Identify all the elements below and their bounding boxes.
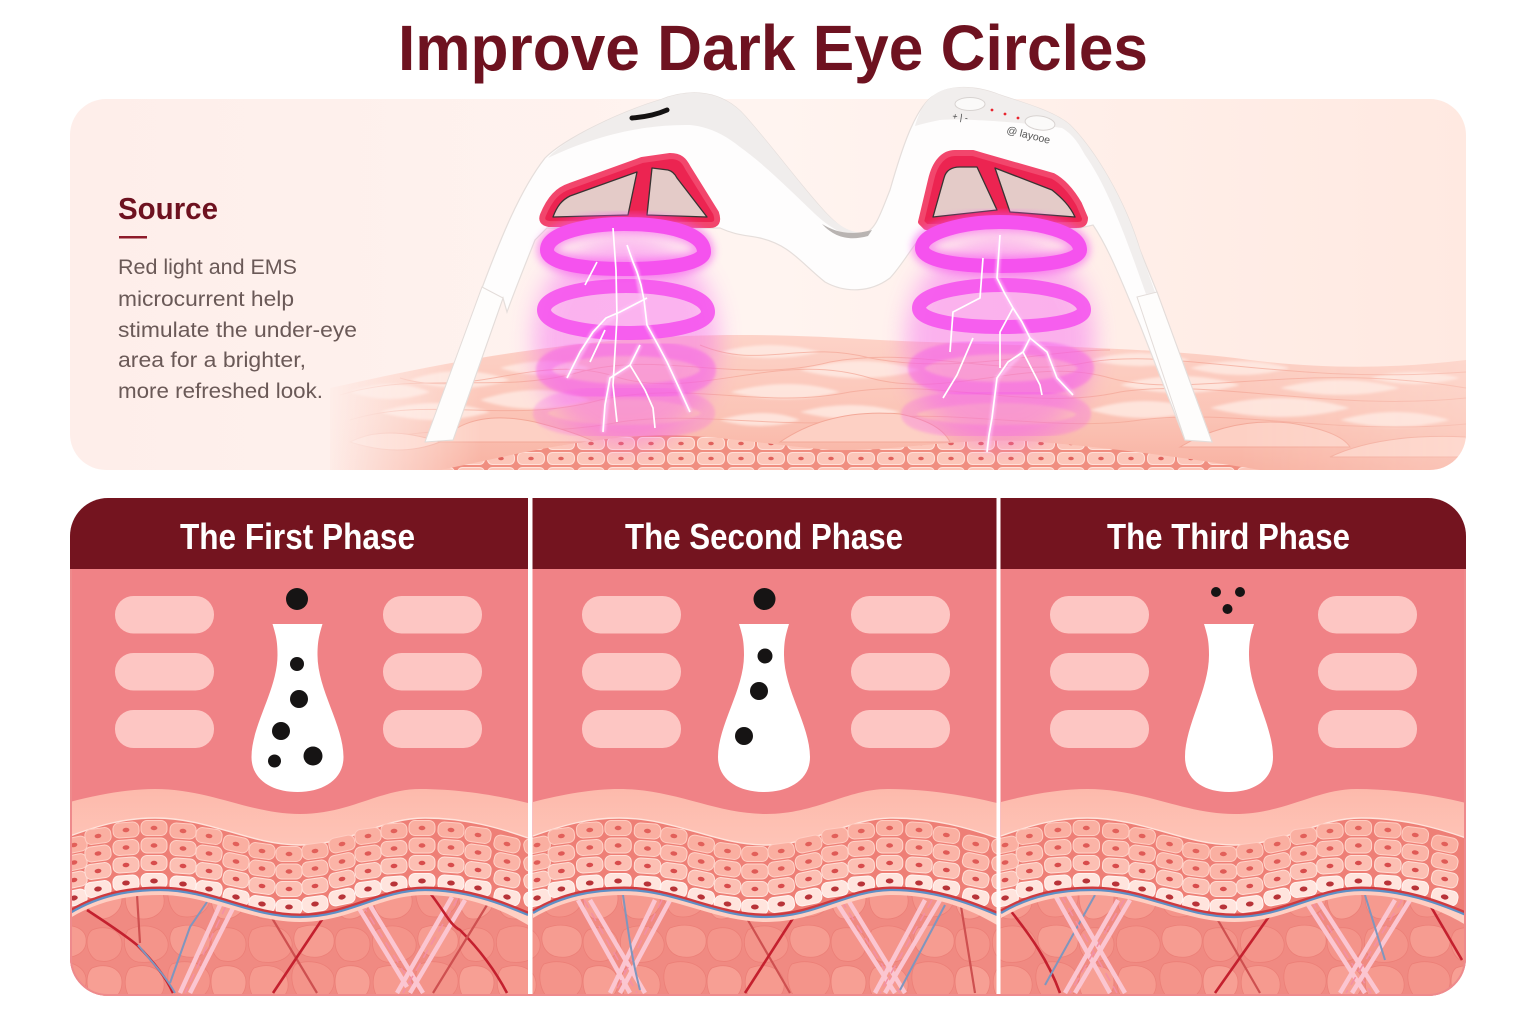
first phase: placeholder pills: [115, 596, 482, 748]
device: under-eye massager: [425, 87, 1212, 442]
first phase: flask with many particles: [252, 588, 344, 792]
title: Improve Dark Eye Circles: [398, 12, 1148, 84]
right eye pad: [921, 153, 1085, 227]
skin cross-section: third phase: [991, 789, 1466, 925]
light rings: right eye: [906, 222, 1094, 445]
source description: more refreshed look.: [118, 380, 323, 403]
charging slot: [632, 110, 667, 118]
heading underline: [119, 236, 147, 238]
vessels: first phase: [87, 893, 507, 993]
light rings: left eye: [534, 224, 718, 445]
phase headers bar: [70, 498, 1466, 569]
lightning: left eye: [567, 228, 690, 432]
bridge shadow: [822, 224, 872, 238]
control panel: buttons, LEDs and logo: + | -: [952, 111, 969, 123]
source description: Red light and EMS: [118, 256, 297, 279]
second phase: flask with fewer particles: [718, 588, 810, 792]
source description: microcurrent help: [118, 288, 294, 311]
lightning: right eye: [943, 235, 1073, 452]
phase panel outline: [71, 569, 1465, 995]
heading: second phase: The Second Phase: [625, 516, 903, 557]
source description: area for a brighter,: [118, 349, 306, 372]
tissue layer: [70, 880, 1466, 996]
third phase: placeholder pills: [1050, 596, 1417, 748]
heading: third phase: The Third Phase: [1107, 516, 1350, 557]
source heading: Source: [118, 191, 218, 226]
second phase: placeholder pills: [582, 596, 950, 748]
source description: stimulate the under-eye: [118, 319, 357, 342]
source description: [118, 256, 357, 403]
divider: second and third phase: [996, 498, 1000, 996]
third phase: clear flask: [1185, 587, 1273, 792]
right top face shading: [915, 87, 1155, 294]
right foot tip: [1137, 292, 1212, 442]
skin cross-section: second phase: [523, 789, 997, 925]
left top face shading: [548, 93, 862, 238]
heading: first phase: The First Phase: [180, 516, 415, 557]
panel: source hero: [70, 87, 1466, 470]
divider: first and second phase: [528, 498, 532, 996]
vessels: second phase: [578, 895, 975, 993]
control panel: buttons, LEDs and logo: @ layooe: [1005, 124, 1052, 147]
left eye pad: [542, 156, 717, 225]
control panel: buttons, LEDs and logo: [952, 98, 1056, 147]
skin surface mesh lines: [340, 345, 1466, 442]
skin surface illustration: [330, 335, 1466, 470]
left foot tip: [425, 287, 503, 442]
panel: three phases: [60, 498, 1466, 996]
skin cross-section: first phase: [60, 789, 528, 925]
vessels: third phase: [1010, 895, 1462, 993]
